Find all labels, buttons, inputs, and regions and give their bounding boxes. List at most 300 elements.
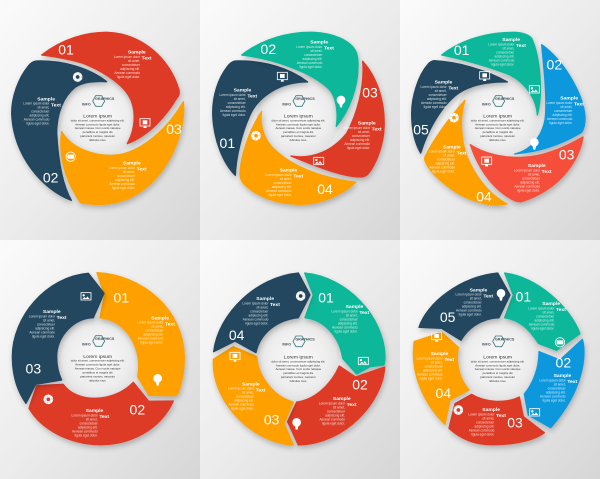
text block: ligula eget dolor. <box>420 376 443 380</box>
centre text <box>71 354 125 382</box>
text block: sit amet, <box>151 325 163 329</box>
text block: ligula eget dolor. <box>223 113 246 117</box>
segment 03 red <box>291 61 384 177</box>
text block: Aenean commodo <box>469 428 495 432</box>
text block: consectetuer <box>80 421 98 425</box>
text block: Lorem ipsum dolor <box>319 401 345 405</box>
text block: sit amet, <box>502 46 514 50</box>
text block: consectetuer <box>122 63 140 67</box>
text block: Lorem ipsum dolor <box>456 293 482 297</box>
icon: aperture <box>74 74 81 80</box>
text block: Sample <box>234 88 252 94</box>
segment 01 red <box>42 32 179 144</box>
text block: adipiscing elit. <box>30 114 49 118</box>
text block: Sample <box>528 163 546 169</box>
icon: image <box>530 409 540 416</box>
text block: ligula eget dolor. <box>299 65 322 69</box>
centre logo: INFO <box>282 343 291 347</box>
centre logo <box>282 336 315 347</box>
centre logo: GRAPHICS <box>95 337 115 341</box>
number 04: 04 <box>476 189 492 205</box>
text block: Text <box>293 174 304 180</box>
centre text: Aenean massa. Cum sociis natoque <box>75 366 121 370</box>
text block: Sample <box>554 373 572 379</box>
text block <box>468 407 506 436</box>
icon: monitor <box>140 119 150 128</box>
centre text: Aenean commodo ligula eget dolor. <box>276 122 321 126</box>
icon: image <box>81 293 91 300</box>
text block: sit amet, <box>560 105 572 109</box>
centre text: dolor sit amet, consectetuer adipiscing elit. <box>471 118 525 122</box>
background <box>200 0 400 240</box>
text block: sit amet, <box>333 405 345 409</box>
text block: Aenean commodo <box>243 317 269 321</box>
centre text: parturient montes, nascetur <box>480 375 515 379</box>
text block: adipiscing elit. <box>435 162 455 166</box>
centre logo: GRAPHICS <box>295 337 315 341</box>
text block: Sample <box>435 80 453 86</box>
centre disk <box>457 318 540 401</box>
text block: adipiscing elit. <box>546 390 566 394</box>
text block: sit amet, <box>234 97 246 101</box>
text block: Text <box>51 102 61 108</box>
centre text: ridiculus mus. <box>89 138 107 142</box>
number 02: 02 <box>43 169 59 185</box>
text block: Aenean commodo <box>514 184 540 188</box>
centre text: Aenean commodo ligula eget dolor. <box>475 363 520 367</box>
text block: Aenean commodo <box>417 372 443 376</box>
text block: Lorem ipsum dolor <box>332 309 358 313</box>
text block: adipiscing elit. <box>249 313 268 317</box>
text block: Text <box>247 94 258 100</box>
number 04: 04 <box>436 385 451 401</box>
number 02: 02 <box>556 354 571 370</box>
centre logo: GRAPHICS <box>495 337 515 341</box>
text block: Text <box>165 321 175 327</box>
text block: Text <box>372 127 382 133</box>
text block <box>514 163 552 192</box>
text block: ligula eget dolor. <box>140 341 163 345</box>
text block: Aenean commodo <box>228 403 254 407</box>
text block: Sample <box>333 396 351 402</box>
text block: Sample <box>43 309 61 315</box>
text block: consectetuer <box>476 420 494 424</box>
text block: Lorem ipsum dolor <box>421 85 447 89</box>
centre disk <box>457 75 540 158</box>
centre text: Lorem ipsum <box>483 114 512 120</box>
text block: Aenean commodo <box>109 182 135 186</box>
text block: Lorem ipsum dolor <box>242 301 268 305</box>
number 01: 01 <box>58 41 74 57</box>
text block: adipiscing elit. <box>303 57 322 61</box>
centre text: penatibus et magnis dis <box>283 130 314 134</box>
text block: ligula eget dolor. <box>112 186 135 190</box>
text block: Aenean commodo <box>344 142 370 146</box>
text block: ligula eget dolor. <box>347 146 370 150</box>
centre logo <box>482 96 515 106</box>
centre text: ridiculus mus. <box>489 138 507 142</box>
centre text: penatibus et magnis dis <box>283 371 314 375</box>
text block: Lorem ipsum dolor <box>228 387 254 391</box>
segment 02 blue <box>515 45 585 154</box>
background <box>400 240 600 479</box>
centre text: Aenean massa. Cum sociis natoque <box>475 367 521 371</box>
text block: consectetuer <box>554 109 572 113</box>
centre text: dolor sit amet, consectetuer adipiscing elit. <box>71 118 125 122</box>
text block: ligula eget dolor. <box>231 407 254 411</box>
text block: sit amet, <box>482 416 494 420</box>
centre logo <box>282 96 315 106</box>
text block <box>332 304 370 333</box>
text block: adipiscing elit. <box>462 305 482 309</box>
text block: consectetuer <box>429 93 447 97</box>
icon: monitor <box>277 72 287 82</box>
text block: Sample <box>502 37 520 43</box>
segment 02 blue <box>524 339 584 428</box>
text block: sit amet, <box>542 310 554 314</box>
segment 01 navy <box>213 61 308 175</box>
number 01: 01 <box>454 42 470 58</box>
icon: bulb <box>153 374 162 386</box>
number 03: 03 <box>26 360 41 376</box>
segment 03 red <box>449 394 544 445</box>
text block: Lorem ipsum dolor <box>546 101 572 105</box>
text block: ligula eget dolor. <box>335 329 358 333</box>
text block: Aenean commodo <box>540 394 566 398</box>
text block <box>540 373 578 402</box>
text block: sit amet, <box>431 360 443 364</box>
centre text: Aenean massa. Cum sociis natoque <box>475 126 521 130</box>
centre text: Lorem ipsum <box>284 114 313 120</box>
text block <box>488 37 526 66</box>
text block: consectetuer <box>228 101 246 105</box>
icon: badge <box>555 338 565 347</box>
text block: ligula eget dolor. <box>531 326 554 330</box>
text block <box>72 408 110 437</box>
text block: Aenean commodo <box>266 189 292 193</box>
text block: sit amet, <box>358 130 370 134</box>
panel: three-segment ring <box>0 240 200 479</box>
text block: adipiscing elit. <box>495 54 514 58</box>
centre text: parturient montes, nascetur <box>480 134 515 138</box>
text block: sit amet, <box>123 170 135 174</box>
panel: five-segment ring <box>400 240 600 479</box>
text block: Lorem ipsum dolor <box>540 378 566 382</box>
text block: sit amet, <box>242 391 254 395</box>
segment 04 orange <box>413 332 469 424</box>
icon: aperture <box>451 114 457 121</box>
centre text: penatibus et magnis dis <box>83 130 113 134</box>
text block: Lorem ipsum dolor <box>23 102 49 106</box>
centre text <box>471 114 525 142</box>
icon: aperture <box>253 132 259 139</box>
text block: ligula eget dolor. <box>471 432 494 436</box>
number 03: 03 <box>264 411 280 427</box>
text block: Sample <box>128 50 146 56</box>
text block: Aenean commodo <box>429 166 455 170</box>
text block: Aenean commodo <box>72 429 98 433</box>
text block: Lorem ipsum dolor <box>417 356 443 360</box>
icon: image <box>529 86 539 93</box>
text block: adipiscing elit. <box>520 180 540 184</box>
text block <box>296 40 334 69</box>
centre text: Lorem ipsum <box>483 354 512 360</box>
text block: consectetuer <box>250 309 268 313</box>
number 01: 01 <box>114 289 129 305</box>
number 02: 02 <box>547 56 562 72</box>
number 02: 02 <box>261 41 276 57</box>
text block: consectetuer <box>425 364 443 368</box>
icon: aperture <box>455 407 462 413</box>
centre logo: INFO <box>482 102 491 106</box>
text block: consectetuer <box>340 317 358 321</box>
text block: sit amet, <box>435 89 447 93</box>
segment 04 orange <box>425 100 507 205</box>
centre text: dolor sit amet, consectetuer adipiscing elit. <box>471 359 525 363</box>
text block: sit amet, <box>554 382 566 386</box>
text block: ligula eget dolor. <box>269 193 292 197</box>
text block: sit amet, <box>86 417 98 421</box>
number 05: 05 <box>440 309 456 325</box>
text block: sit amet, <box>43 318 55 322</box>
text block: Aenean commodo <box>138 337 164 341</box>
centre text: dolor sit amet, consectetuer adipiscing elit. <box>271 118 325 122</box>
text block <box>114 50 152 79</box>
centre text: parturient montes, nascetur <box>80 374 115 378</box>
segment 04 navy <box>214 273 310 353</box>
text block: Text <box>496 413 506 419</box>
text block <box>429 144 467 174</box>
text block <box>137 315 175 345</box>
centre disk <box>57 75 140 158</box>
text block: Sample <box>560 96 578 102</box>
text block: Text <box>270 302 280 308</box>
text block: ligula eget dolor. <box>517 188 540 192</box>
text block: adipiscing elit. <box>325 413 345 417</box>
text block: Aenean commodo <box>319 417 345 421</box>
text block: Text <box>556 307 566 313</box>
text block: adipiscing elit. <box>144 333 163 337</box>
text block: Lorem ipsum dolor <box>514 168 540 172</box>
icon: image <box>358 357 368 365</box>
centre text: ridiculus mus. <box>290 379 307 383</box>
text block: Text <box>137 167 147 173</box>
text block: Lorem ipsum dolor <box>429 150 455 154</box>
text block: consectetuer <box>437 158 455 162</box>
text block: consectetuer <box>274 181 292 185</box>
text block <box>319 396 357 425</box>
text block: consectetuer <box>522 176 540 180</box>
text block: Aenean commodo <box>456 309 482 313</box>
text block: Lorem ipsum dolor <box>220 93 246 97</box>
text block: Aenean commodo <box>489 58 515 62</box>
text block <box>29 309 67 338</box>
segment 03 navy <box>12 273 104 403</box>
text block: Aenean commodo <box>29 330 55 334</box>
centre logo <box>82 336 115 346</box>
icon: image <box>314 157 324 165</box>
text block: sit amet, <box>346 313 358 317</box>
text block: ligula eget dolor. <box>75 433 98 437</box>
centre text: parturient montes, nascetur <box>281 134 316 138</box>
text block: Text <box>483 293 494 299</box>
text block: Text <box>99 414 110 420</box>
text block: Text <box>57 315 67 321</box>
text block: Sample <box>542 301 560 307</box>
text block: Text <box>457 150 467 156</box>
text block <box>417 351 455 380</box>
text block: Sample <box>151 315 169 321</box>
centre text: Aenean massa. Cum sociis natoque <box>275 367 322 371</box>
icon: aperture <box>45 396 52 403</box>
number 03: 03 <box>362 84 378 100</box>
text block: consectetuer <box>548 386 566 390</box>
icon: monitor <box>482 157 492 166</box>
text block: Sample <box>256 296 274 302</box>
number 03: 03 <box>166 121 182 137</box>
segment 05 navy <box>412 61 507 153</box>
segment 05 navy <box>419 273 510 340</box>
centre text: Aenean massa. Cum sociis natoque <box>75 126 121 130</box>
text block: consectetuer <box>496 50 514 54</box>
text block: Text <box>444 357 455 363</box>
text block: Text <box>142 56 152 62</box>
text block: Text <box>359 310 370 316</box>
centre text <box>271 354 325 383</box>
centre disk <box>57 317 140 400</box>
text block: ligula eget dolor. <box>491 62 514 66</box>
panel: three-segment swirl <box>0 0 200 240</box>
text block: Lorem ipsum dolor <box>109 166 135 170</box>
centre logo: GRAPHICS <box>295 97 315 101</box>
centre logo: GRAPHICS <box>495 97 515 101</box>
text block <box>528 301 566 330</box>
number 02: 02 <box>130 401 145 417</box>
segment 01 teal <box>442 32 540 115</box>
centre logo: GRAPHICS <box>95 97 115 101</box>
text block: Lorem ipsum dolor <box>488 42 514 46</box>
centre logo: INFO <box>82 342 91 346</box>
text block: ligula eget dolor. <box>424 105 447 109</box>
text block: Lorem ipsum dolor <box>528 306 554 310</box>
text block: consectetuer <box>327 409 345 413</box>
text block: sit amet, <box>256 305 268 309</box>
icon: bulb <box>292 418 301 430</box>
number 05: 05 <box>413 122 429 138</box>
text block <box>23 96 61 126</box>
text block: sit amet, <box>128 59 140 63</box>
text block <box>266 168 304 197</box>
segment 02 red <box>29 382 173 445</box>
text block: Sample <box>123 161 141 167</box>
text block: consectetuer <box>37 322 55 326</box>
text block: Lorem ipsum dolor <box>344 126 370 130</box>
segment 03 orange <box>213 347 293 445</box>
centre text: ridiculus mus. <box>290 138 307 142</box>
text block: sit amet, <box>310 49 322 53</box>
text block: Aenean commodo <box>220 109 246 113</box>
segment 02 teal <box>242 32 358 126</box>
centre text: Aenean commodo ligula eget dolor. <box>475 122 520 126</box>
text block: ligula eget dolor. <box>245 321 268 325</box>
text block: Aenean commodo <box>529 322 555 326</box>
centre text <box>71 114 125 142</box>
text block: Aenean commodo <box>332 325 358 329</box>
text block: Text <box>448 86 459 92</box>
text block: Aenean commodo <box>547 117 573 121</box>
segment 04 orange <box>240 111 356 204</box>
centre text: Aenean commodo ligula eget dolor. <box>276 363 321 367</box>
panel: four-segment ring <box>200 240 400 479</box>
text block: Sample <box>242 381 260 387</box>
text block: adipiscing elit. <box>475 424 494 428</box>
text block: adipiscing elit. <box>553 113 572 117</box>
centre text: Aenean commodo ligula eget dolor. <box>75 363 120 367</box>
icon: monitor <box>432 332 442 342</box>
text block: Text <box>516 43 526 49</box>
text block: adipiscing elit. <box>423 368 443 372</box>
text block: consectetuer <box>145 329 163 333</box>
text block <box>456 287 494 317</box>
segment 01 teal <box>305 273 385 374</box>
text block: sit amet, <box>443 154 455 158</box>
centre logo: INFO <box>82 102 91 106</box>
text block <box>421 80 459 109</box>
segment 01 orange <box>97 273 184 396</box>
number 01: 01 <box>318 289 334 305</box>
text block: ligula eget dolor. <box>459 313 482 317</box>
text block: consectetuer <box>31 110 49 114</box>
icon: aperture <box>297 293 304 299</box>
text block: adipiscing elit. <box>338 321 358 325</box>
text block: Text <box>324 46 334 52</box>
text block: sit amet, <box>470 297 482 301</box>
centre text: Lorem ipsum <box>83 114 112 120</box>
text block: consectetuer <box>304 53 322 57</box>
text block: adipiscing elit. <box>427 97 447 101</box>
text block: ligula eget dolor. <box>322 421 345 425</box>
text block: adipiscing elit. <box>226 105 246 109</box>
text block: Text <box>256 387 266 393</box>
centre text: parturient montes, nascetur <box>80 134 115 138</box>
background <box>0 240 200 479</box>
text block: sit amet, <box>37 106 49 110</box>
centre text <box>271 114 325 142</box>
text block: ligula eget dolor. <box>32 334 55 338</box>
text block: Lorem ipsum dolor <box>468 412 494 416</box>
text block <box>220 88 258 117</box>
text block: Sample <box>37 96 55 102</box>
text block <box>242 296 280 325</box>
text block: ligula eget dolor. <box>26 122 49 126</box>
number 04: 04 <box>317 181 333 197</box>
text block: Text <box>542 169 552 175</box>
centre text: penatibus et magnis dis <box>483 371 513 375</box>
icon: bulb <box>530 138 539 150</box>
text block: Aenean commodo <box>421 101 447 105</box>
centre disk <box>257 75 340 158</box>
background <box>200 240 400 479</box>
icon: monitor <box>480 72 490 81</box>
text block: sit amet, <box>280 177 292 181</box>
centre text: ridiculus mus. <box>489 379 507 383</box>
text block: Lorem ipsum dolor <box>72 413 98 417</box>
text block: ligula eget dolor. <box>543 398 566 402</box>
centre text: Aenean massa. Cum sociis natoque <box>275 126 322 130</box>
centre logo: INFO <box>282 102 291 106</box>
text block: adipiscing elit. <box>78 425 98 429</box>
text block: Sample <box>86 408 104 414</box>
